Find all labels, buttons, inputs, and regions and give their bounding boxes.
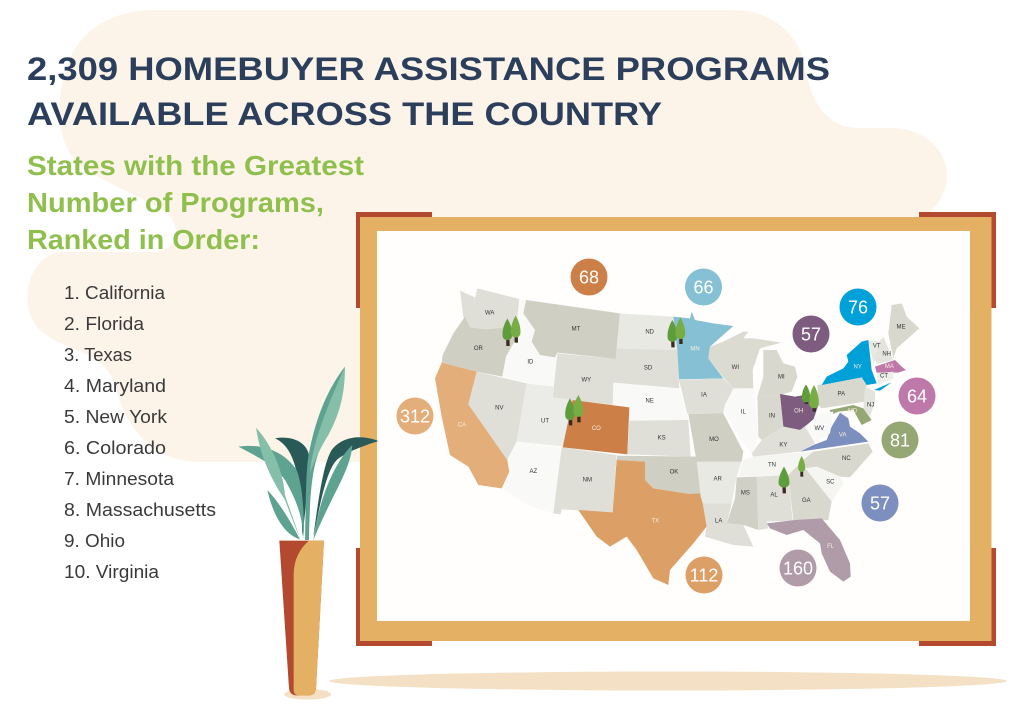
eastern states: AL — [770, 492, 778, 498]
subheading: Number of Programs, — [27, 187, 324, 218]
western states: NE — [646, 399, 654, 405]
ranked state list: 5. New York — [64, 407, 168, 427]
bubble: Ohio 57: 57 — [801, 324, 821, 344]
western states: OK — [670, 470, 678, 476]
western states: CA — [458, 422, 466, 428]
ranked state list: 9. Ohio — [64, 531, 125, 551]
western states: WA — [485, 310, 494, 316]
eastern states: MI — [778, 375, 785, 381]
ranked state list: 4. Maryland — [64, 376, 166, 396]
western states: OR — [474, 346, 483, 352]
ranked state list: 7. Minnesota — [64, 469, 175, 489]
bubble: Massachusetts 64 — [898, 378, 936, 414]
eastern states: ME — [897, 324, 905, 330]
bubble: Texas 112 — [686, 556, 722, 594]
ranked state list: 2. Florida — [64, 314, 145, 334]
western states: UT — [541, 419, 549, 425]
bubble: Florida 160: 160 — [783, 558, 813, 578]
eastern states: VT — [873, 343, 881, 349]
western states: NV — [495, 406, 503, 412]
bubble: Minnesota 66 — [685, 268, 722, 306]
bubble: Colorado 68: 68 — [579, 268, 599, 288]
eastern states: NC — [842, 456, 851, 462]
leaves — [238, 367, 378, 540]
western states: ND — [645, 330, 655, 336]
eastern states: NJ — [867, 403, 874, 409]
western states: WY — [582, 378, 591, 384]
bubble: New York 76: 76 — [848, 298, 868, 318]
vase — [279, 541, 324, 695]
western states: CO — [592, 426, 601, 432]
eastern states: WV — [815, 426, 824, 432]
bubble: Texas 112: 112 — [690, 566, 718, 586]
eastern states: TN — [768, 463, 776, 469]
western states: TX — [652, 519, 659, 525]
trees — [503, 316, 819, 493]
eastern states: IL — [741, 410, 746, 416]
western states: NM — [583, 478, 592, 484]
US map — [396, 258, 936, 594]
subheading: Ranked in Order: — [27, 224, 260, 255]
ranked state list: 3. Texas — [64, 345, 132, 365]
eastern states: KY — [779, 442, 787, 448]
eastern states: SC — [826, 480, 835, 486]
picture frame — [356, 212, 996, 646]
bubble: California 312 — [396, 398, 434, 434]
bubble: Maryland 81: 81 — [890, 430, 910, 450]
ranked state list: 6. Colorado — [64, 438, 166, 458]
eastern states: VA — [839, 433, 846, 439]
subheading: States with the Greatest — [27, 150, 364, 181]
eastern states: NY — [854, 364, 862, 370]
eastern states: CT — [880, 374, 888, 380]
ranked state list: 10. Virginia — [64, 562, 160, 582]
eastern states: WI — [732, 365, 739, 371]
western states: AZ — [530, 469, 537, 475]
eastern states: MO — [709, 437, 719, 443]
eastern states: LA — [715, 519, 722, 525]
western states — [435, 288, 707, 585]
eastern states: MS — [741, 490, 750, 496]
bubble: Ohio 57 — [792, 316, 830, 352]
bubble: Minnesota 66: 66 — [693, 278, 714, 298]
eastern states: FL — [827, 544, 835, 550]
bubble: Virginia 57: 57 — [870, 494, 890, 514]
vase base shadow — [284, 689, 331, 700]
western states: ID — [527, 359, 534, 365]
title: 2,309 HOMEBUYER ASSISTANCE PROGRAMS — [27, 51, 830, 87]
western states: KS — [658, 436, 666, 442]
bubble: Maryland 81 — [882, 422, 918, 458]
background blob — [27, 10, 947, 462]
floor shadow — [329, 672, 1007, 690]
subheading — [27, 150, 364, 255]
eastern states: GA — [802, 498, 811, 504]
bubble: Virginia 57 — [862, 484, 898, 522]
ranked state list: 8. Massachusetts — [64, 500, 216, 520]
eastern states: NH — [882, 351, 891, 357]
eastern states: AR — [714, 477, 722, 483]
bubble: New York 76 — [840, 288, 876, 326]
bubble: California 312: 312 — [400, 406, 430, 426]
ranked state list — [64, 283, 216, 582]
eastern states — [673, 303, 919, 582]
eastern states: PA — [838, 391, 845, 397]
title: AVAILABLE ACROSS THE COUNTRY — [27, 96, 662, 132]
western states: SD — [644, 366, 653, 372]
eastern states: OH — [794, 408, 803, 414]
bubble: Florida 160 — [780, 550, 816, 586]
ranked state list: 1. California — [64, 283, 166, 303]
bubble: Massachusetts 64: 64 — [907, 386, 927, 406]
eastern states: MN — [690, 346, 700, 352]
eastern states: MD — [848, 408, 858, 414]
title — [27, 51, 830, 132]
eastern states: IN — [769, 413, 775, 419]
potted plant — [238, 367, 378, 700]
eastern states: MA — [885, 364, 894, 370]
bubble: Colorado 68 — [570, 258, 608, 296]
eastern states: IA — [701, 393, 707, 399]
western states: MT — [572, 326, 581, 332]
